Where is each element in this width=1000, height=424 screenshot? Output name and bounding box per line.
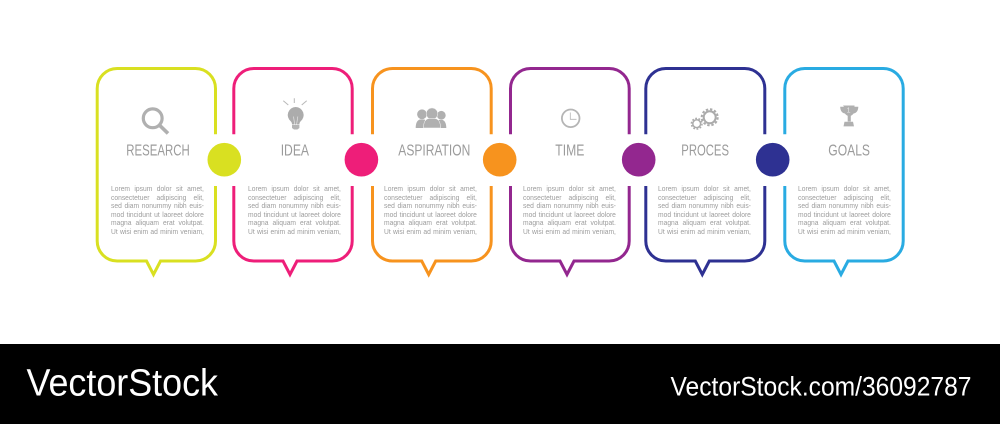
icon: people — [416, 108, 446, 128]
text block: research: Ut wisi enim ad minim veniam, — [111, 227, 204, 236]
panel: time — [510, 68, 629, 274]
connector dot: purple — [622, 143, 656, 176]
heading: research: RESEARCH — [126, 143, 190, 160]
text block: time — [523, 185, 625, 239]
text block: proces: consectetuer adipiscing elit, — [658, 193, 751, 202]
panel: idea — [234, 68, 352, 274]
text block: goals: Ut wisi enim ad minim veniam, — [798, 227, 891, 236]
text block: idea: mod tincidunt ut laoreet dolore — [248, 210, 341, 219]
icon: magnifier — [143, 109, 168, 133]
text block: goals: sed diam nonummy nibh euis- — [798, 201, 891, 210]
text block: proces: Ut wisi enim ad minim veniam, — [658, 227, 751, 236]
text block: aspiration — [384, 185, 486, 239]
text block: idea: sed diam nonummy nibh euis- — [248, 201, 341, 210]
text block: time: magna aliquam erat volutpat. — [523, 218, 616, 227]
text block: research: mod tincidunt ut laoreet dolore — [111, 210, 204, 219]
text block: research — [111, 185, 213, 239]
text block: aspiration: Ut wisi enim ad minim veniam, — [384, 227, 477, 236]
text block: idea: Ut wisi enim ad minim veniam, — [248, 227, 341, 236]
text block: time: consectetuer adipiscing elit, — [523, 193, 616, 202]
panel outline: research — [97, 68, 216, 274]
text block: aspiration: consectetuer adipiscing elit, — [384, 193, 477, 202]
panel: goals — [785, 68, 903, 274]
connector dot: pink — [345, 143, 378, 176]
heading: time: TIME — [555, 143, 584, 160]
panel outline: aspiration — [372, 68, 491, 274]
connector dot: lime — [208, 143, 241, 176]
panel: research — [97, 68, 216, 274]
footer url text: VectorStock.com/36092787 — [670, 372, 972, 402]
text block: idea — [248, 185, 350, 239]
text block: goals: magna aliquam erat volutpat. — [798, 218, 891, 227]
heading: aspiration: ASPIRATION — [398, 143, 470, 160]
text block: proces: magna aliquam erat volutpat. — [658, 218, 751, 227]
connector dot: navy — [756, 143, 790, 176]
text block: goals — [798, 185, 900, 239]
text block: research: sed diam nonummy nibh euis- — [111, 201, 204, 210]
heading: proces: PROCES — [681, 143, 729, 160]
panel outline: proces — [646, 68, 765, 274]
text block: goals: consectetuer adipiscing elit, — [798, 193, 891, 202]
icon: trophy — [840, 106, 858, 126]
panel outline: goals — [785, 68, 903, 274]
heading: goals: GOALS — [828, 143, 870, 160]
text block: goals: mod tincidunt ut laoreet dolore — [798, 210, 891, 219]
text block: time: Ut wisi enim ad minim veniam, — [523, 227, 616, 236]
text block: aspiration: sed diam nonummy nibh euis- — [384, 201, 477, 210]
panel: aspiration — [372, 68, 491, 274]
text block: proces — [658, 185, 760, 239]
footer band — [0, 344, 1000, 424]
icon: gears — [691, 109, 718, 129]
heading: idea: IDEA — [281, 143, 309, 160]
panel: proces — [646, 68, 765, 274]
text block: time: sed diam nonummy nibh euis- — [523, 201, 616, 210]
footer logo text: VectorStock — [26, 362, 219, 404]
text block: research: consectetuer adipiscing elit, — [111, 193, 204, 202]
connector dot: orange — [483, 143, 516, 176]
text block: aspiration: magna aliquam erat volutpat. — [384, 218, 477, 227]
text block: idea: consectetuer adipiscing elit, — [248, 193, 341, 202]
text block: proces: mod tincidunt ut laoreet dolore — [658, 210, 751, 219]
text block: aspiration: mod tincidunt ut laoreet dolore — [384, 210, 477, 219]
text block: proces: sed diam nonummy nibh euis- — [658, 201, 751, 210]
icon: trophy: 1 — [847, 108, 851, 114]
icon: clock — [562, 110, 580, 127]
text block: time: mod tincidunt ut laoreet dolore — [523, 210, 616, 219]
text block: research: magna aliquam erat volutpat. — [111, 218, 204, 227]
panel outline: time — [510, 68, 629, 274]
icon: light bulb — [283, 98, 307, 130]
text block: idea: magna aliquam erat volutpat. — [248, 218, 341, 227]
panel outline: idea — [234, 68, 352, 274]
